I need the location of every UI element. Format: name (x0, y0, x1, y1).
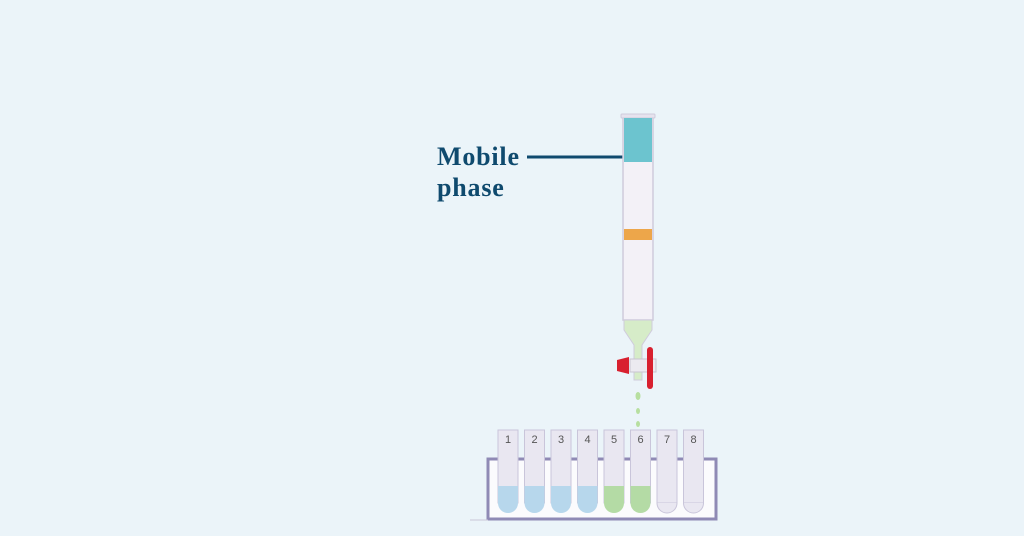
tube 1: 1 (505, 434, 511, 446)
tube 3: 3 (558, 434, 564, 446)
tube 1 (498, 430, 518, 513)
label: mobile phase (437, 142, 520, 202)
test tube rack (470, 430, 716, 520)
tube 6 (630, 430, 650, 513)
drops (636, 392, 640, 427)
tube 4 (578, 430, 598, 513)
tube 7: 7 (664, 434, 670, 446)
tube 7 (657, 430, 677, 513)
tube 2: 2 (531, 434, 538, 446)
stopcock (617, 347, 656, 389)
tube 4: 4 (584, 434, 591, 446)
tube 5: 5 (611, 434, 617, 446)
tube 8: 8 (690, 434, 697, 446)
tube 2 (524, 430, 544, 513)
tube 6: 6 (637, 434, 644, 446)
label: mobile phase: phase (437, 173, 505, 202)
chromatography column (617, 114, 656, 427)
tube 8 (684, 430, 704, 513)
tube 3 (551, 430, 571, 513)
leader line (527, 156, 638, 158)
label: mobile phase: Mobile (437, 142, 520, 171)
tube 5 (604, 430, 624, 513)
